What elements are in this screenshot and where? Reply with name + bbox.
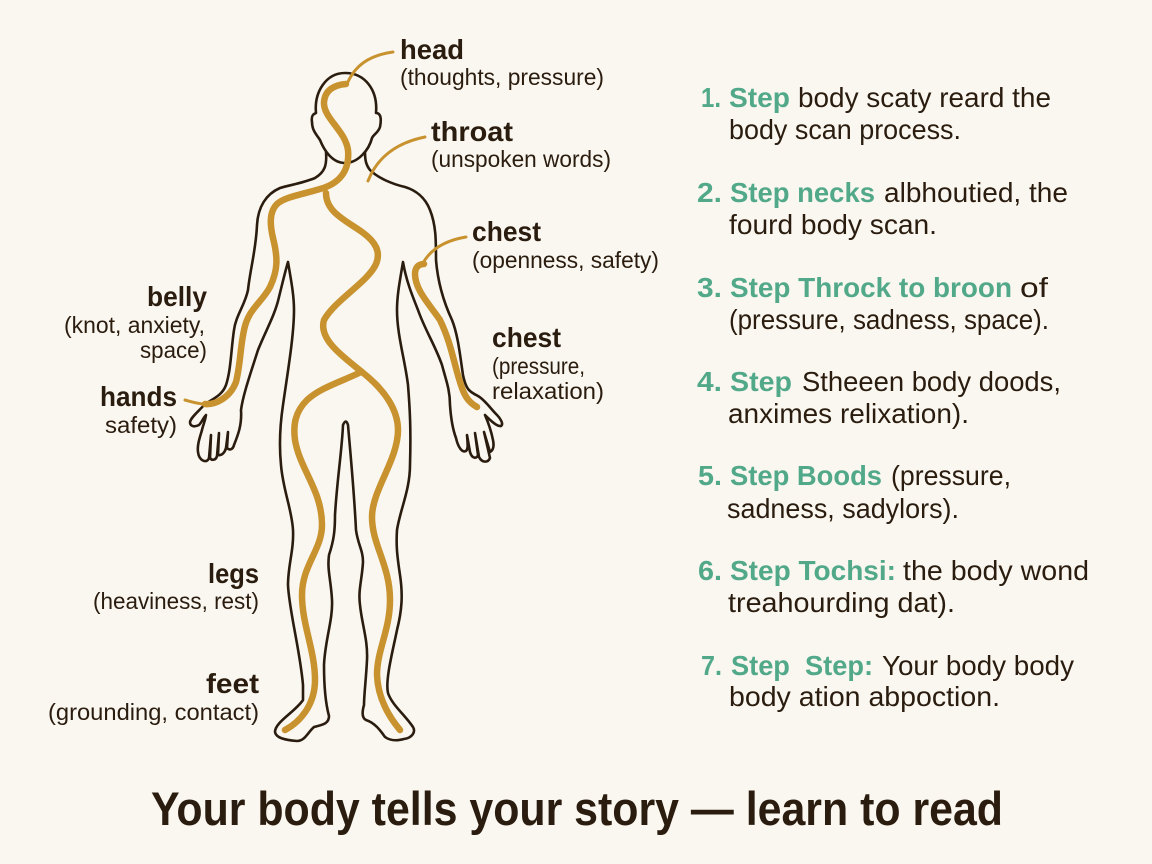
label: chest lower — [492, 322, 604, 404]
label: hands: hands — [100, 381, 177, 412]
label: feet — [48, 668, 259, 725]
step 1 — [701, 82, 1051, 145]
label: belly: (knot, anxiety, — [64, 312, 205, 338]
label: head: (thoughts, pressure) — [400, 64, 604, 90]
step 7 — [701, 650, 1074, 712]
step 3: of — [1020, 272, 1048, 303]
step 4: Step — [730, 366, 792, 397]
step 2: 2. — [697, 177, 722, 208]
step 4 — [697, 366, 1061, 429]
label: head — [400, 34, 604, 90]
step 5: Step Boods — [730, 460, 882, 491]
step 1: body scan process. — [729, 114, 961, 145]
label: chest upper: (openness, safety) — [472, 247, 659, 273]
body outline — [190, 73, 502, 741]
step 7: body ation abpoction. — [729, 681, 1000, 712]
step 3 — [697, 272, 1049, 335]
label: legs: legs — [208, 558, 259, 589]
step 2: albhoutied, the — [884, 177, 1068, 208]
step 5: sadness, sadylors). — [727, 493, 959, 524]
step 7: Your body body — [882, 650, 1074, 681]
step 7: Step Step: — [731, 650, 873, 681]
label: feet: (grounding, contact) — [48, 699, 259, 725]
label: chest upper: chest — [472, 216, 541, 247]
step 7: 7. — [701, 650, 722, 681]
label: feet: feet — [206, 668, 259, 699]
label: head: head — [400, 34, 464, 65]
label: throat: throat — [431, 116, 513, 147]
step 1: Step — [729, 82, 790, 113]
step 1: body scaty reard the — [798, 82, 1051, 113]
callout lines — [185, 52, 466, 404]
step 6 — [698, 555, 1089, 618]
step 3: Step Throck to broon — [730, 272, 1012, 303]
step 3: (pressure, sadness, space). — [729, 304, 1049, 335]
step 2: fourd body scan. — [729, 209, 937, 240]
step 4: anximes relixation). — [728, 398, 969, 429]
label: belly: space) — [140, 337, 207, 363]
label: legs — [93, 558, 259, 614]
step 5 — [698, 460, 1011, 524]
step 6: Step Tochsi: — [730, 555, 896, 586]
label: hands — [100, 381, 177, 438]
step 5: 5. — [698, 460, 722, 491]
label: legs: (heaviness, rest) — [93, 588, 259, 614]
step 6: the body wond — [903, 555, 1089, 586]
label: hands: safety) — [105, 412, 177, 438]
step 3: 3. — [697, 272, 722, 303]
steps list — [697, 82, 1089, 712]
step 6: 6. — [698, 555, 722, 586]
body figure — [185, 52, 502, 741]
label: chest lower: relaxation) — [492, 378, 604, 404]
step 1: 1. — [701, 82, 721, 113]
step 4: Stheeen body doods, — [802, 366, 1061, 397]
label: throat: (unspoken words) — [431, 146, 611, 172]
label: chest lower: chest — [492, 322, 561, 353]
step 2 — [697, 177, 1068, 240]
step 4: 4. — [697, 366, 722, 397]
step 5: (pressure, — [891, 460, 1011, 491]
step 6: treahourding dat). — [728, 587, 955, 618]
label: belly: belly — [147, 281, 207, 312]
label: belly — [64, 281, 207, 363]
label: chest lower: (pressure, — [492, 353, 585, 379]
title: Your body tells your story — learn to read — [151, 782, 1003, 835]
label: chest upper — [472, 216, 659, 273]
step 2: Step necks — [730, 177, 875, 208]
gold energy lines — [205, 84, 477, 730]
label: throat — [431, 116, 611, 172]
